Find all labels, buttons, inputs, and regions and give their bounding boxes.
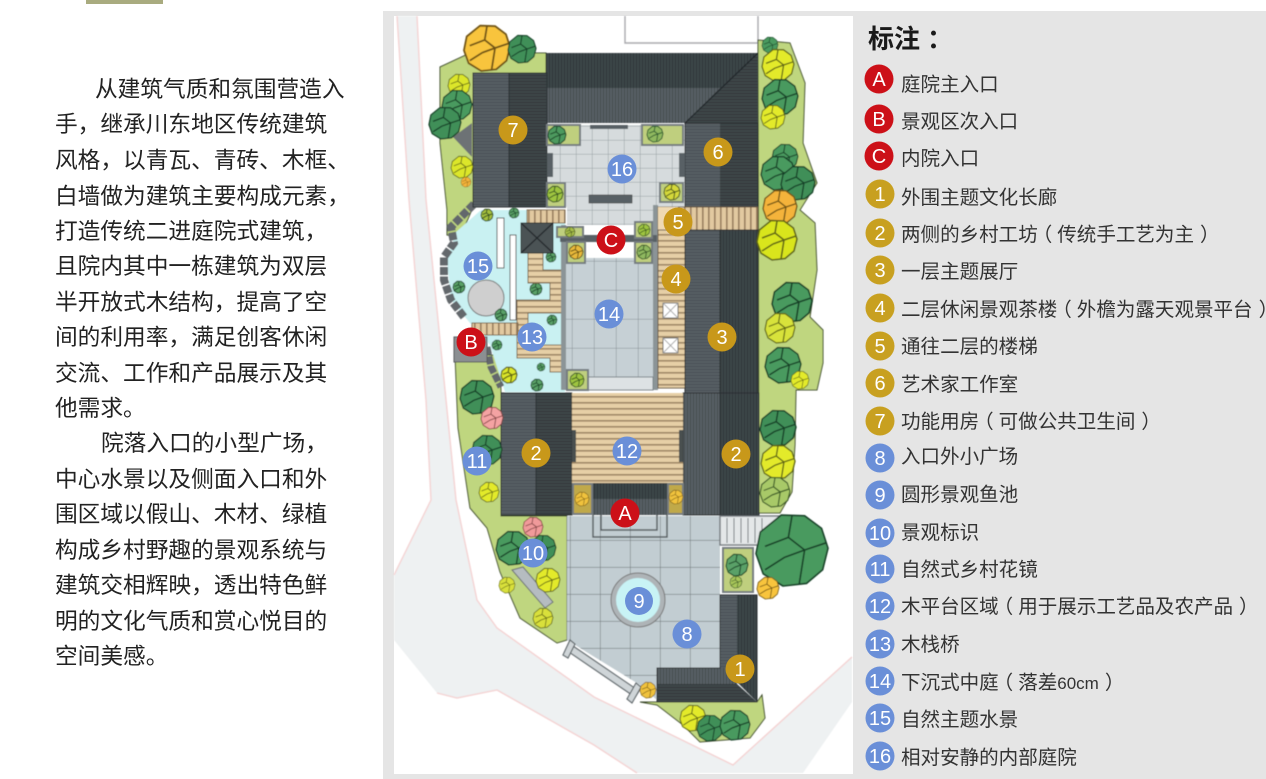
- surrounding road: [394, 16, 852, 773]
- legend item 8: 8: [874, 448, 886, 470]
- pavilion roof: [521, 223, 553, 253]
- legend item 3: [866, 256, 1018, 284]
- marker B: [456, 328, 486, 356]
- marker 7: [498, 116, 528, 144]
- legend item 12: [866, 592, 1259, 620]
- legend item 2: [866, 218, 1220, 248]
- neighbouring plot outline: [625, 16, 758, 43]
- body text block: 风格，以青瓦、青砖、木框、: [55, 147, 350, 173]
- legend item 14: [866, 666, 1124, 696]
- legend item 7: 7: [874, 411, 886, 433]
- marker 8: 8: [681, 624, 693, 646]
- courtyard planters: [547, 125, 683, 390]
- legend item C: C: [872, 146, 886, 168]
- legend item A: A: [872, 69, 886, 91]
- west roof: function rooms: [473, 73, 547, 207]
- planting beds: [440, 40, 823, 742]
- legend item B: B: [872, 109, 886, 131]
- marker 9: [625, 587, 653, 615]
- water plants: [453, 208, 557, 391]
- legend item 12: 木平台区域（ 用于展示工艺品及农产品 ）: [901, 596, 1259, 618]
- legend item 8: 入口外小广场: [901, 446, 1018, 468]
- legend item 9: 9: [874, 485, 886, 507]
- wooden deck: [572, 393, 683, 483]
- marker 10: [518, 538, 548, 568]
- legend title: 标注 ：: [868, 24, 953, 54]
- body text block: 打造传统二进庭院式建筑，: [55, 218, 327, 244]
- legend item 9: [866, 480, 1018, 510]
- legend item 8: [866, 444, 1018, 472]
- trees and shrubs: [429, 26, 828, 741]
- marker C: C: [604, 230, 618, 252]
- legend item 11: [866, 554, 1038, 584]
- legend item 15: [866, 704, 1018, 732]
- body text block: 空间美感。: [55, 643, 168, 669]
- marker 6: 6: [712, 142, 724, 164]
- stone landscape marker: [512, 567, 553, 608]
- marker 3: 3: [716, 327, 728, 349]
- marker 9: 9: [633, 591, 645, 613]
- east roof: artist studio: [685, 53, 758, 207]
- legend item 7: 功能用房（ 可做公共卫生间 ）: [901, 411, 1161, 433]
- marker 2 west: 2: [530, 443, 542, 465]
- legend item 16: 16: [869, 746, 891, 768]
- corner planter: [723, 548, 753, 592]
- legend item 2: 两侧的乡村工坊（ 传统手工艺为主 ）: [901, 224, 1220, 246]
- marker 13: [518, 322, 546, 352]
- marker A: [610, 498, 640, 528]
- legend item 3: 3: [874, 260, 886, 282]
- marker 2 east: [722, 440, 750, 468]
- legend item 9: 圆形景观鱼池: [901, 484, 1018, 506]
- side walls of sunken courtyard: [561, 205, 658, 390]
- legend item 10: 景观标识: [901, 522, 979, 544]
- legend item 16: [866, 742, 1077, 770]
- rockery steps: [453, 123, 472, 157]
- legend item C: 内院入口: [901, 148, 979, 170]
- body text block: 交流、工作和产品展示及其: [55, 360, 327, 386]
- legend item 4: 4: [874, 298, 886, 320]
- marker 14: 14: [598, 304, 620, 326]
- entry steps of sunken courtyard: [588, 377, 653, 390]
- marker 12: 12: [616, 441, 638, 463]
- legend item 5: [866, 332, 1038, 360]
- body text block: [55, 76, 350, 669]
- top-left olive accent bar: [86, 0, 163, 4]
- marker 5: 5: [672, 212, 684, 234]
- body text block: 围区域以假山、木材、绿植: [55, 501, 327, 527]
- inner courtyard paving: [547, 125, 685, 225]
- legend item 10: [866, 518, 979, 548]
- marker 10: 10: [522, 543, 544, 565]
- plan markers: [456, 116, 754, 684]
- body text block: 手，继承川东地区传统建筑: [55, 111, 328, 137]
- fountain: [611, 573, 665, 627]
- marker 5: [664, 208, 692, 236]
- body text block: 半开放式木结构，提高了空: [55, 289, 327, 315]
- body text block: 明的文化气质和赏心悦目的: [55, 608, 327, 634]
- wooden boardwalks: [472, 210, 565, 372]
- body text block: 他需求。: [55, 395, 146, 421]
- marker 1: 1: [734, 659, 746, 681]
- upper tea terrace: [658, 230, 685, 388]
- legend item 1: 1: [874, 184, 886, 206]
- body text block: 建筑交相辉映，透出特色鲜: [55, 572, 327, 598]
- marker 11: [462, 446, 492, 476]
- legend item 14: 14: [869, 671, 891, 693]
- legend item 10: 10: [869, 523, 891, 545]
- marker 16: [608, 154, 636, 184]
- stair walkway: [658, 207, 758, 230]
- legend item 2: 2: [874, 223, 886, 245]
- legend item 12: 12: [869, 596, 891, 618]
- north roof: [546, 53, 758, 123]
- water feature: [444, 204, 565, 392]
- marker 15: 15: [467, 256, 489, 278]
- marker 13: 13: [521, 327, 543, 349]
- legend item 1: 外围主题文化长廊: [901, 187, 1057, 209]
- marker A: A: [618, 503, 632, 525]
- legend item 4: [866, 294, 1266, 322]
- courtyard walls and benches: [547, 125, 685, 242]
- gray backing panel: [383, 11, 1266, 779]
- marker C: [596, 226, 626, 254]
- marker 2 east: 2: [730, 444, 742, 466]
- body text block: 且院内其中一栋建筑为双层: [55, 253, 327, 279]
- legend item 11: 自然式乡村花镜: [901, 559, 1038, 581]
- side stairs: [720, 516, 780, 545]
- legend item B: [864, 104, 1018, 134]
- legend item A: 庭院主入口: [901, 74, 999, 96]
- legend item 13: 13: [869, 634, 891, 656]
- legend item 7: [866, 406, 1161, 436]
- marker 1: [726, 654, 754, 684]
- body text block: 从建筑气质和氛围营造入: [95, 76, 345, 102]
- long corridor roof: [657, 595, 757, 702]
- plan base drawing: [394, 16, 852, 773]
- marker 3: [708, 322, 736, 352]
- body text block: 构成乡村野趣的景观系统与: [55, 537, 327, 563]
- legend item 6: 6: [874, 373, 886, 395]
- east roof: exhibition hall: [685, 230, 758, 393]
- body text block: 间的利用率，满足创客休闲: [55, 324, 327, 350]
- legend item 6: [866, 368, 1018, 398]
- marker 6: [704, 138, 732, 166]
- marker 11: 11: [467, 451, 487, 473]
- legend item 15: 自然主题水景: [901, 709, 1018, 731]
- legend item 3: 一层主题展厅: [901, 261, 1018, 283]
- legend item 1: [866, 180, 1057, 209]
- south-east workshop roof: [683, 393, 759, 515]
- legend item 11: 11: [870, 559, 890, 581]
- legend item 13: [866, 630, 960, 658]
- sunken courtyard paving: [565, 258, 655, 390]
- marker 14: [594, 300, 624, 328]
- panel: legend: [864, 64, 1266, 770]
- legend item A: [864, 64, 999, 96]
- marker 8: [672, 620, 702, 648]
- marker 7: 7: [507, 120, 519, 142]
- courtyard planter shrubs: [547, 126, 680, 387]
- marker 15: [464, 252, 492, 280]
- legend item 5: 通往二层的楼梯: [901, 336, 1038, 358]
- marker 4: 4: [670, 269, 682, 291]
- legend item 5: 5: [874, 336, 886, 358]
- marker 2 west: [522, 438, 550, 468]
- legend item 16: 相对安静的内部庭院: [901, 747, 1077, 769]
- legend item B: 景观区次入口: [901, 111, 1018, 133]
- legend item 14: 下沉式中庭（ 落差60cm ）: [901, 672, 1124, 694]
- body text block: 院落入口的小型广场，: [101, 430, 328, 456]
- entrance plaza paving: [567, 516, 720, 700]
- landscape bench: [563, 640, 641, 703]
- legend item 15: 15: [869, 708, 891, 730]
- panel: site plan: [394, 16, 853, 774]
- legend item 6: 艺术家工作室: [901, 374, 1018, 396]
- body text block: 中心水景以及侧面入口和外: [55, 466, 327, 492]
- legend item 13: 木栈桥: [901, 634, 960, 656]
- south-west workshop roof: [501, 393, 572, 515]
- entry planters: [573, 484, 683, 514]
- marker 12: [612, 436, 642, 466]
- main gate roof and steps: [593, 483, 667, 537]
- legend item C: [864, 142, 979, 170]
- marker 4: [662, 264, 690, 294]
- body text block: 白墙做为建筑主要构成元素，: [55, 183, 350, 209]
- marker 16: 16: [611, 159, 633, 181]
- marker B: B: [464, 332, 478, 354]
